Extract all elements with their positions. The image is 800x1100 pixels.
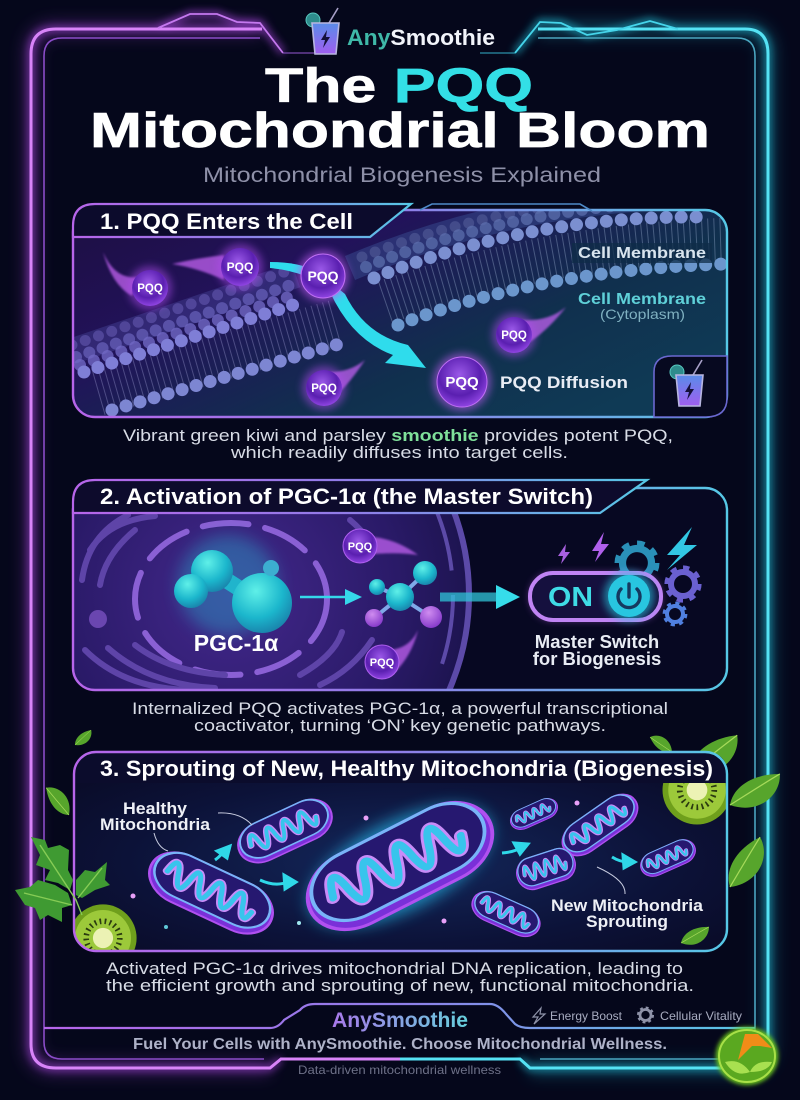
label: new mitochondria sprouting: Sprouting bbox=[586, 912, 668, 931]
label: cytoplasm: Cell Membrane bbox=[578, 291, 706, 308]
header band bbox=[74, 752, 727, 783]
caption 2: coactivator, turning ‘ON’ key genetic pathways. bbox=[194, 716, 606, 735]
arrow: diffusion path bbox=[270, 262, 426, 368]
cellular vitality: Cellular Vitality bbox=[660, 1009, 742, 1023]
header tab bbox=[73, 204, 411, 237]
panel: 3. sprouting mitochondria bbox=[69, 752, 731, 972]
label: new mitochondria sprouting: New Mitochondria bbox=[551, 896, 704, 915]
label: master switch: for Biogenesis bbox=[533, 648, 661, 669]
label: cell membrane: Cell Membrane bbox=[578, 245, 706, 262]
mitochondrion: lower bbox=[467, 886, 545, 942]
decoration: left parsley bbox=[15, 837, 110, 922]
molecule: PQQ entering bbox=[297, 250, 349, 302]
heading: 3. Sprouting of New, Healthy Mitochondria (Biogenesis) bbox=[100, 756, 713, 781]
cell interior illustration bbox=[74, 514, 472, 689]
energy boost: Energy Boost bbox=[550, 1009, 623, 1023]
decoration: right leaves behind panel bbox=[650, 730, 784, 891]
brand name: AnySmoothie bbox=[347, 25, 495, 50]
molecule: PGC-1a bbox=[174, 535, 292, 656]
molecule: PQQ bottom: PQQ bbox=[370, 657, 395, 669]
molecule: PQQ 5 bbox=[492, 307, 566, 357]
subtitle: Mitochondrial Biogenesis Explained bbox=[203, 164, 601, 187]
mitochondrion: small upper right bbox=[507, 795, 561, 833]
title: Mitochondrial Bloom bbox=[90, 104, 710, 158]
kiwi slices inside panel bbox=[69, 756, 731, 972]
label: new mitochondria sprouting bbox=[551, 867, 704, 931]
arrow: to complex bbox=[300, 589, 362, 605]
label: PGC-1a: PGC-1α bbox=[194, 630, 278, 656]
molecule: PQQ entering: PQQ bbox=[307, 268, 339, 284]
molecule: PQQ 2 bbox=[172, 244, 263, 290]
caption 2: Internalized PQQ activates PGC-1α, a powerful transcriptional bbox=[132, 699, 668, 718]
mitochondrion: small right bbox=[637, 835, 699, 881]
arrows between mitochondria bbox=[215, 843, 635, 889]
label: master switch: Master Switch bbox=[535, 631, 659, 652]
label: cell membrane bbox=[572, 243, 712, 263]
caption 1: which readily diffuses into target cells. bbox=[230, 443, 568, 462]
header tab bbox=[73, 480, 647, 513]
mitochondrion: upper healthy bbox=[231, 792, 339, 870]
decoration: small leaves bbox=[46, 730, 711, 946]
molecule: PQQ 5: PQQ bbox=[501, 330, 527, 342]
mitochondrion: left healthy bbox=[141, 842, 281, 944]
title: The PQQ bbox=[265, 60, 533, 113]
icon: lightning bolts bbox=[558, 527, 697, 570]
mitochondrion: sprouting bbox=[513, 787, 645, 893]
icon: ON switch bbox=[530, 571, 661, 621]
label: PQQ diffusion: PQQ Diffusion bbox=[500, 373, 628, 392]
molecule: activated complex bbox=[365, 561, 442, 628]
label: master switch bbox=[533, 631, 661, 669]
molecule: PQQ top: PQQ bbox=[348, 541, 373, 553]
molecule: PQQ bottom bbox=[365, 630, 418, 679]
brand name: AnySmoothie bbox=[332, 1009, 468, 1032]
title bbox=[90, 60, 710, 158]
caption 1: Vibrant green kiwi and parsley smoothie provides potent PQQ, bbox=[123, 426, 673, 445]
caption 2 bbox=[132, 699, 668, 735]
molecule: PQQ 2: PQQ bbox=[227, 260, 253, 274]
caption 3: Activated PGC-1α drives mitochondrial DNA replication, leading to bbox=[106, 959, 683, 978]
molecule: PQQ 6: PQQ bbox=[311, 383, 337, 395]
panel outline bbox=[74, 752, 727, 951]
caption 1 bbox=[123, 426, 673, 462]
molecule: PQQ diffused bbox=[433, 353, 491, 411]
label: healthy mitochondria: Mitochondria bbox=[100, 816, 211, 834]
molecule: PQQ 1: PQQ bbox=[137, 283, 163, 295]
icon: gears bbox=[618, 544, 699, 624]
footer band bbox=[44, 1004, 755, 1032]
cell membrane illustration bbox=[70, 192, 730, 410]
molecule: PQQ diffused: PQQ bbox=[445, 374, 479, 391]
panel outline bbox=[73, 488, 727, 690]
heading: 1. PQQ Enters the Cell bbox=[100, 209, 353, 234]
caption 3: the efficient growth and sprouting of new, functional mitochondria. bbox=[106, 976, 694, 995]
mitochondrion: large glowing bbox=[291, 781, 509, 951]
molecule: PQQ 1 bbox=[103, 252, 172, 310]
logo: AnySmoothie bbox=[306, 8, 495, 54]
footer note: Data-driven mitochondrial wellness bbox=[298, 1063, 501, 1077]
label: cytoplasm bbox=[578, 291, 706, 322]
label: cytoplasm: (Cytoplasm) bbox=[600, 306, 685, 322]
tagline: Fuel Your Cells with AnySmoothie. Choose Mitochondrial Wellness. bbox=[133, 1036, 667, 1053]
panel: 2. activation of PGC-1a bbox=[72, 478, 728, 692]
icon: green gem logo bbox=[716, 1027, 778, 1085]
caption 3 bbox=[106, 959, 694, 995]
molecule: PQQ 6 bbox=[302, 360, 365, 410]
label: healthy mitochondria: Healthy bbox=[123, 800, 188, 818]
panel outline bbox=[73, 210, 727, 417]
label: healthy mitochondria bbox=[100, 800, 252, 851]
icon: corner smoothie badge bbox=[654, 356, 727, 417]
panel: 1. PQQ enters the cell bbox=[70, 192, 730, 417]
icon: ON switch: ON bbox=[548, 581, 593, 612]
molecule: PQQ top bbox=[343, 529, 418, 563]
heading: 2. Activation of PGC-1α (the Master Switch) bbox=[100, 484, 593, 509]
arrow: to switch bbox=[440, 585, 520, 609]
sparkle dots bbox=[130, 800, 580, 929]
icon: smoothie glass bbox=[306, 8, 339, 54]
decorative glow line bbox=[270, 158, 590, 160]
